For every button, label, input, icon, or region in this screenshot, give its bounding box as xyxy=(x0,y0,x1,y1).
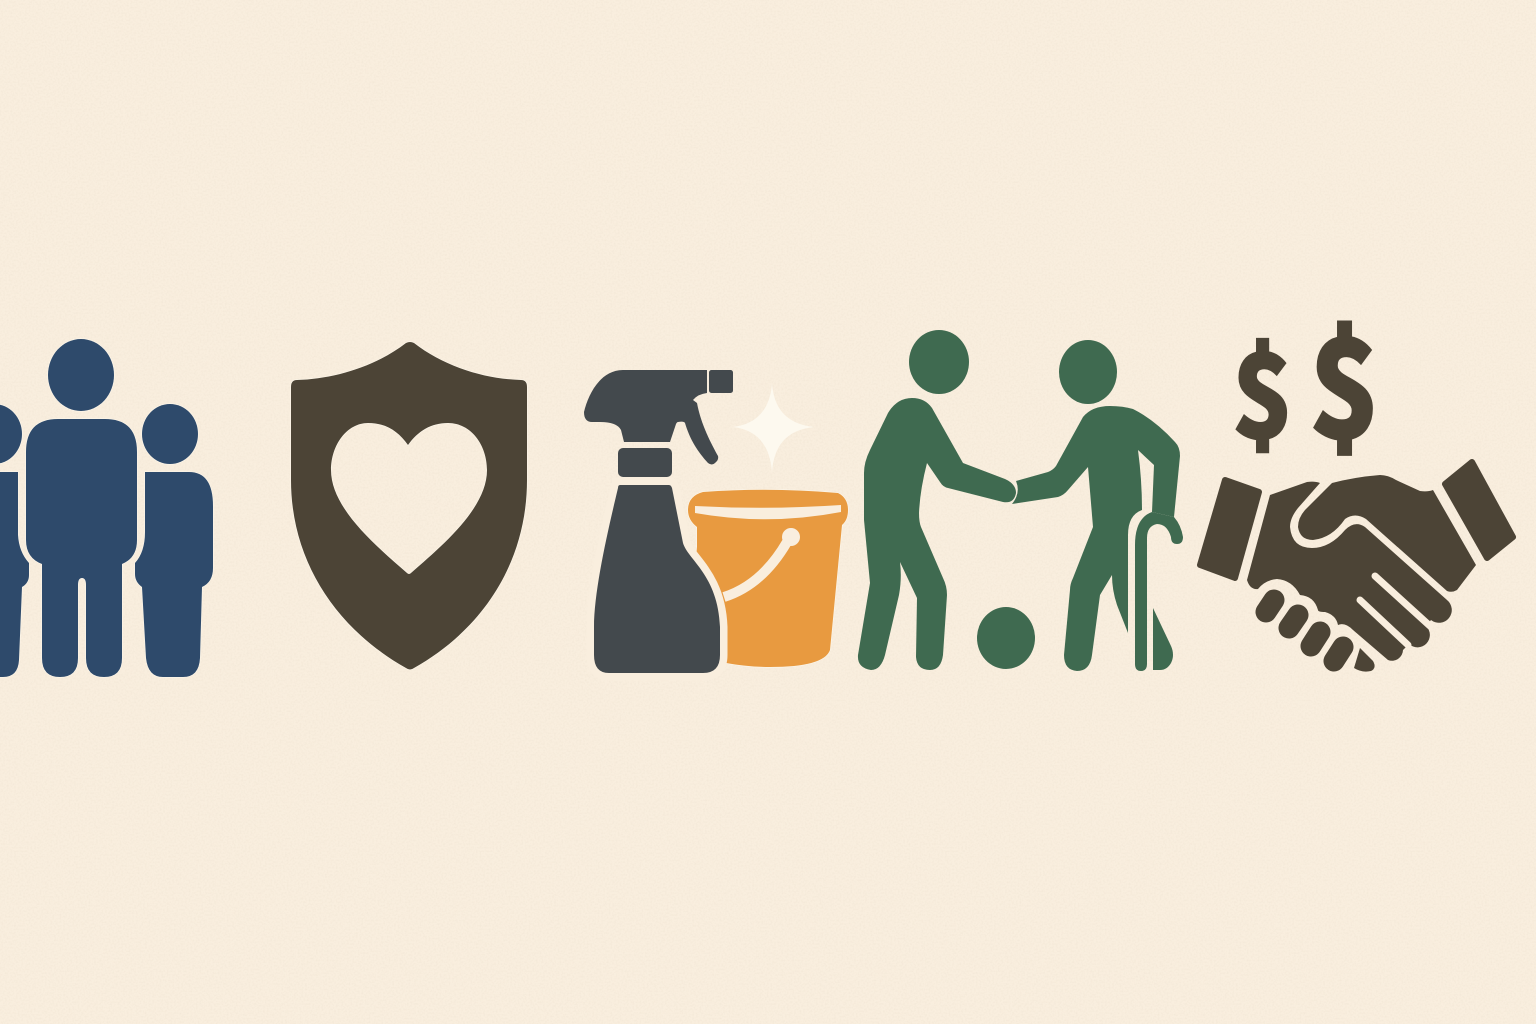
bucket xyxy=(688,490,848,667)
icon: sparkle xyxy=(733,384,814,472)
small finger xyxy=(1354,648,1375,672)
icon: family group xyxy=(0,339,213,677)
gripping fingers xyxy=(1266,600,1343,661)
left child figure xyxy=(0,404,29,677)
caregiver figure xyxy=(858,330,1016,670)
dollar signs: $ xyxy=(1309,279,1380,478)
right child figure xyxy=(135,404,213,677)
bottle body xyxy=(594,485,720,673)
elder figure xyxy=(1012,340,1183,671)
icon: dollars and handshake xyxy=(1200,279,1513,672)
bucket rim highlight xyxy=(695,505,841,519)
dollar signs xyxy=(1232,279,1380,478)
upper hand xyxy=(1298,475,1476,592)
bottle collar xyxy=(618,448,672,477)
nozzle tip xyxy=(709,370,733,393)
finger slits xyxy=(1360,576,1430,645)
ball xyxy=(977,607,1035,669)
trigger head xyxy=(584,370,718,464)
spray bottle xyxy=(584,370,733,673)
lower hand xyxy=(1247,482,1452,661)
adult figure xyxy=(26,339,137,677)
bucket handle xyxy=(724,532,796,597)
icon: shield with heart xyxy=(291,342,527,670)
icon: caregiver helping elder xyxy=(858,330,1183,671)
walking cane xyxy=(1135,512,1183,671)
left cuff xyxy=(1200,480,1259,578)
dollar signs: $ xyxy=(1232,304,1293,472)
right cuff xyxy=(1445,462,1513,558)
icon: spray bottle and bucket xyxy=(584,370,848,673)
elder back leg xyxy=(1153,608,1173,670)
